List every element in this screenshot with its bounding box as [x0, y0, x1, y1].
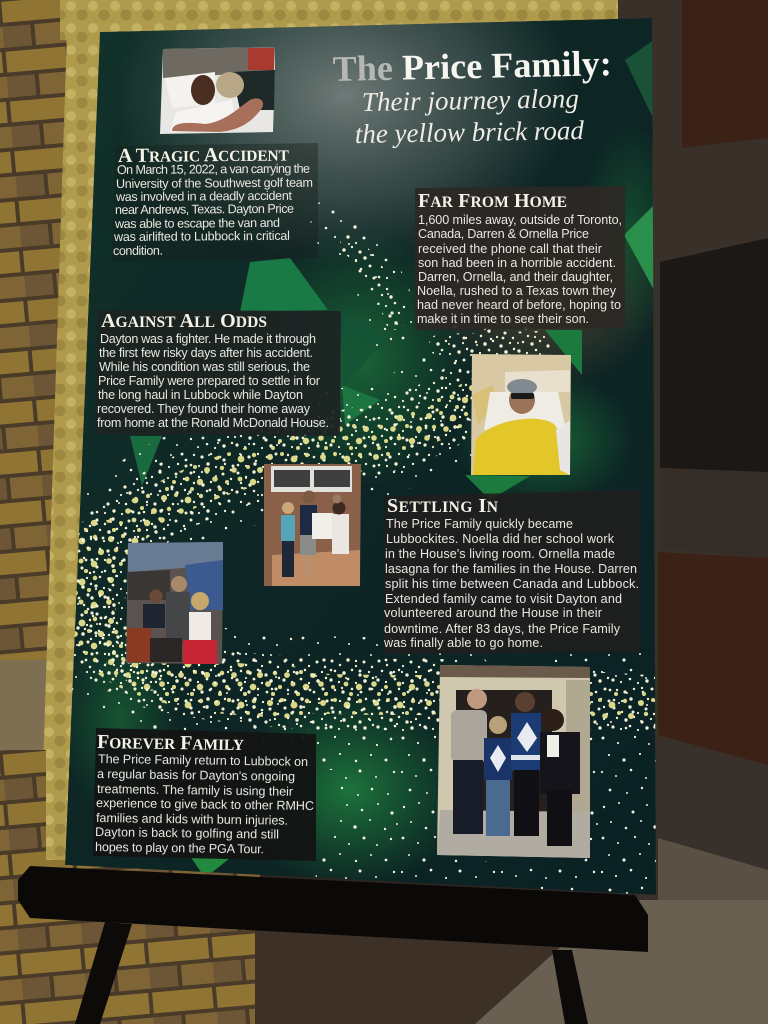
panel: Settling In: was finally able to go home. — [383, 636, 543, 650]
panel: Forever Family: experience to give back to other RMHC — [96, 796, 314, 813]
photo: family with house sign — [264, 464, 361, 586]
panel: Forever Family: hopes to play on the PGA Tour. — [95, 840, 264, 856]
panel: Far From Home: 1,600 miles away, outside of Toronto, — [418, 213, 622, 227]
panel: Far From Home: Noella, rushed to a Texas town they — [417, 284, 617, 298]
sparkle swirl — [85, 225, 660, 890]
panel: Against All Odds: from home at the Ronald McDonald House. — [97, 416, 329, 430]
panel: Settling In: SETTLING IN — [387, 495, 498, 517]
panel: A Tragic Accident: was airlifted to Lubbock in critical — [113, 229, 290, 244]
poster board — [60, 0, 680, 895]
title: the yellow brick road — [355, 115, 585, 149]
panel: Forever Family: a regular basis for Dayton's ongoing — [97, 767, 295, 784]
panel: Settling In: Extended family came to visit Dayton and — [385, 592, 622, 606]
photo: Dayton in yellow gown — [471, 354, 571, 475]
panel: Against All Odds: the long haul in Lubbock while Dayton — [98, 388, 303, 402]
panel: Settling In: split his time between Canada and Lubbock. — [385, 577, 639, 591]
panel: Against All Odds: recovered. They found their home away — [97, 402, 311, 416]
glare and glow — [60, 0, 680, 890]
panel: Settling In — [383, 490, 640, 654]
panel: Against All Odds: the first few risky days after his accident. — [99, 346, 313, 360]
panel: Settling In: in the House's living room. Ornella made — [385, 547, 615, 561]
panel: Forever Family: treatments. The family is using their — [97, 782, 293, 799]
panel: Forever Family: Dayton is back to golfing and still — [95, 825, 279, 842]
panel: Settling In: The Price Family quickly became — [386, 517, 573, 531]
panel: A Tragic Accident: A TRAGIC ACCIDENT — [118, 144, 290, 167]
panel: A Tragic Accident: condition. — [113, 244, 163, 258]
panel: Far From Home: FAR FROM HOME — [418, 190, 567, 212]
panel: Far From Home: Canada, Darren & Ornella Price — [418, 227, 589, 241]
panel: Settling In: lasagna for the families in the House. Darren — [385, 562, 637, 576]
photo: family in Maple Leafs jerseys — [437, 665, 590, 858]
panel: Against All Odds: While his condition was still serious, the — [99, 360, 310, 374]
panel: A Tragic Accident: near Andrews, Texas. Dayton Price — [115, 202, 294, 217]
panel: Settling In: downtime. After 83 days, the Price Family — [384, 622, 621, 636]
panel: A Tragic Accident: On March 15, 2022, a van carrying the — [117, 162, 310, 177]
panel: Far From Home: Darren, Ornella, and their daughter, — [418, 270, 613, 284]
panel: A Tragic Accident: University of the Southwest golf team — [116, 176, 313, 191]
panel: Forever Family: families and kids with burn injuries. — [96, 811, 288, 828]
panel: A Tragic Accident: was involved in a deadly accident — [115, 189, 293, 204]
photo: family at table — [126, 542, 223, 664]
low-poly green facets — [130, 40, 654, 878]
title — [332, 43, 612, 149]
panel: Settling In: volunteered around the House in their — [384, 606, 602, 620]
panel: Against All Odds: AGAINST ALL ODDS — [101, 310, 267, 332]
panel: Far From Home: had never heard of before, hoping to — [417, 298, 621, 312]
panel: Forever Family: FOREVER FAMILY — [97, 731, 244, 755]
panel: Settling In: Lubbockites. Noella did her school work — [386, 532, 615, 546]
easel ledge — [18, 866, 648, 1024]
panel: Against All Odds: Price Family were prepared to settle in for — [98, 374, 320, 388]
panel: Against All Odds: Dayton was a fighter. He made it through — [100, 332, 316, 346]
panel: Forever Family — [93, 728, 316, 861]
title: Their journey along — [362, 83, 579, 117]
photo: hospital bed — [160, 47, 275, 134]
panel: Far From Home: son had been in a horrible accident. — [418, 256, 616, 270]
panel: Far From Home: received the phone call that their — [418, 242, 602, 256]
panel: Against All Odds — [95, 310, 341, 436]
title: The Price Family: — [332, 43, 612, 89]
panel: A Tragic Accident: was able to escape the van and — [114, 216, 280, 231]
panel: Far From Home — [415, 186, 625, 330]
panel: A Tragic Accident — [112, 143, 318, 262]
panel: Far From Home: make it in time to see their son. — [417, 312, 589, 326]
panel: Forever Family: The Price Family return to Lubbock on — [98, 752, 308, 769]
